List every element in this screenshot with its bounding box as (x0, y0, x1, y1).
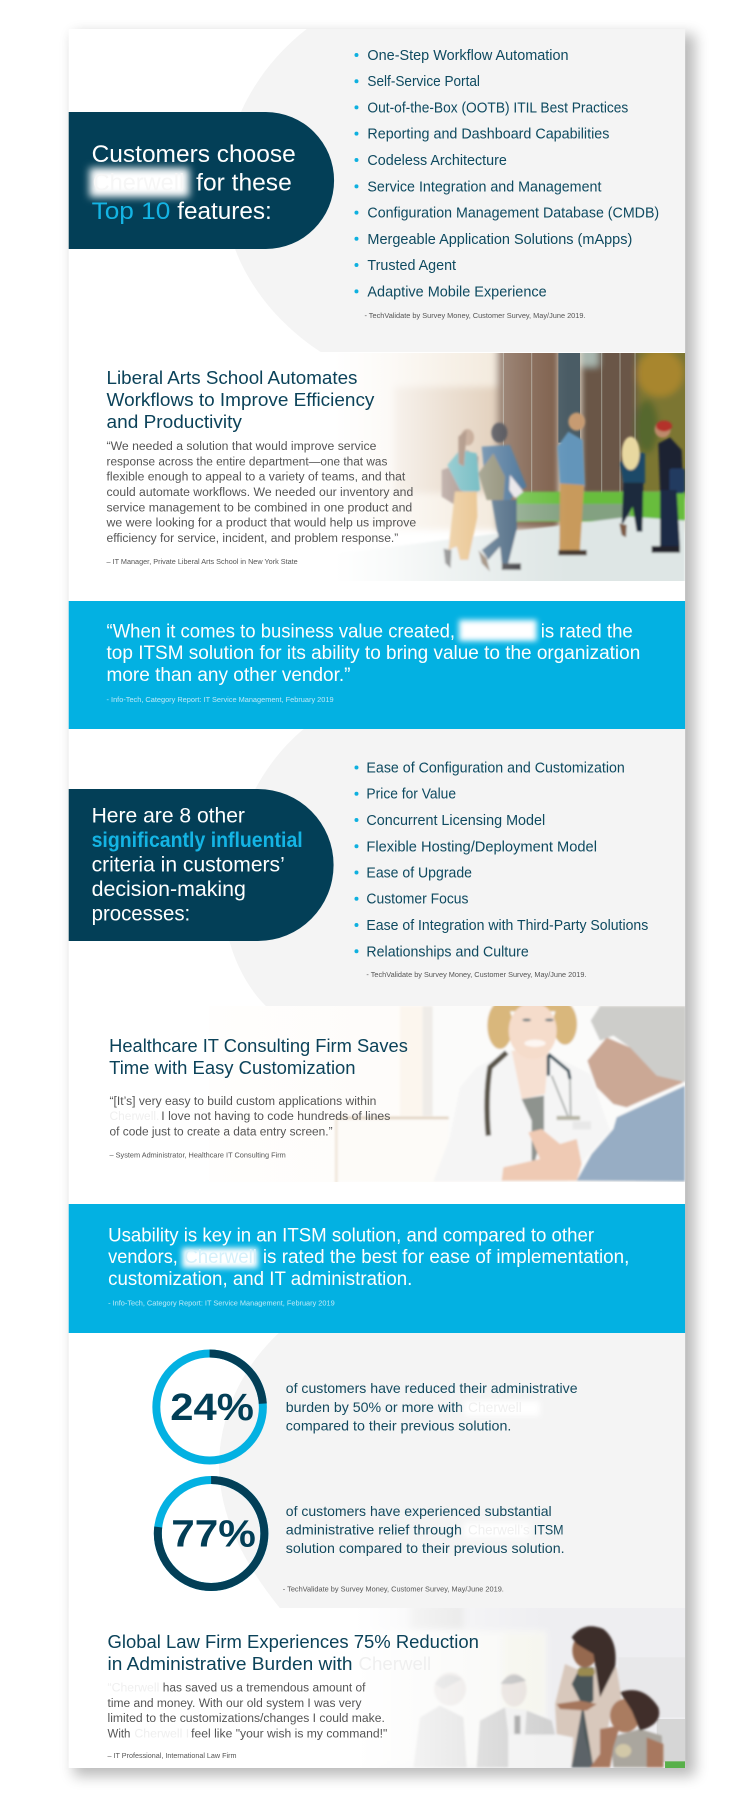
quote text: flexible enough to appeal to a variety of teams, and that (107, 470, 406, 484)
survey source: - TechValidate by Survey Money, Customer Survey, May/June 2019. (283, 1585, 504, 1594)
grey arc background (225, 729, 685, 1006)
stat text: 24%: of customers have reduced their administrative (286, 1381, 578, 1396)
quote: top ITSM solution for its ability to bring value to the organization (107, 643, 640, 664)
attribution: – IT Professional, International Law Firm (108, 1751, 236, 1760)
quote: more than any other vendor.” (107, 665, 351, 686)
case study heading: Healthcare IT Consulting Firm Saves (109, 1035, 408, 1056)
grey arc background (219, 1333, 685, 1608)
card background (69, 29, 685, 1768)
attribution: – System Administrator, Healthcare IT Consulting Firm (110, 1151, 286, 1160)
panel: business value quote (69, 601, 685, 729)
patient's shirt (577, 1086, 685, 1181)
panel: liberal arts school case study (101, 343, 700, 583)
feature list: Configuration Management Database (CMDB) (367, 206, 659, 222)
source: - Info-Tech, Category Report: IT Service Management, February 2019 (108, 1299, 335, 1308)
panel: 8 other criteria (69, 729, 685, 1006)
quote text: could automate workflows. We needed our inventory and (107, 485, 413, 499)
case study heading (107, 367, 375, 432)
grey arc background (224, 29, 685, 352)
photo: doctor and patient (334, 1006, 685, 1182)
heading pill: Customers choose (92, 141, 296, 168)
feature list: Out-of-the-Box (OOTB) ITIL Best Practices (367, 100, 628, 116)
feature list: Trusted Agent (367, 258, 456, 274)
criteria list: Customer Focus (366, 892, 469, 908)
quote: Cherwell (184, 1247, 257, 1268)
quote: “When it comes to business value created, (107, 622, 455, 643)
stat text: 77% (286, 1504, 565, 1556)
case study heading: and Productivity (107, 411, 243, 432)
patient's hair (591, 1006, 686, 1082)
quote text: I love not having to code hundreds of lines (161, 1109, 390, 1123)
student in red beanie (658, 437, 683, 490)
stat text: 77%: Cherwell’s (468, 1523, 530, 1538)
stat text: 77%: of customers have experienced substantial (286, 1504, 552, 1519)
donut: 24% (156, 1354, 263, 1460)
quote text: limited to the customizations/changes I could make. (108, 1711, 385, 1725)
quote text (110, 1094, 390, 1139)
feature list: Mergeable Application Solutions (mApps) (367, 232, 632, 248)
stat text: 77%: solution compared to their previous solution. (286, 1541, 565, 1556)
quote text: response across the entire department—one that was (107, 454, 387, 468)
quote text: time and money. With our old system I was very (108, 1696, 362, 1710)
case study heading: Time with Easy Customization (109, 1057, 356, 1078)
photo: students on campus (387, 353, 686, 581)
heading pill: Cherwell (93, 169, 184, 197)
criteria list: Ease of Upgrade (366, 865, 472, 882)
heading pill: criteria in customers’ (92, 854, 285, 877)
feature list: One-Step Workflow Automation (367, 48, 569, 64)
donut: 77%: 77% (171, 1514, 256, 1556)
heading pill: decision-making (92, 878, 246, 901)
feature list: Self-Service Portal (367, 74, 480, 90)
stat text: 77%: ITSM (534, 1523, 564, 1538)
quote text (106, 439, 416, 545)
survey source: - TechValidate by Survey Money, Customer Survey, May/June 2019. (364, 311, 586, 320)
feature list: Reporting and Dashboard Capabilities (367, 127, 609, 143)
criteria list: Ease of Integration with Third-Party Solutions (366, 918, 648, 934)
panel: healthcare case study (109, 1002, 687, 1183)
panel: global law firm case study (69, 1604, 687, 1768)
quote (107, 620, 640, 686)
heading pill: processes: (92, 903, 190, 926)
source: - Info-Tech, Category Report: IT Service Management, February 2019 (107, 695, 334, 704)
case study heading: Liberal Arts School Automates (107, 367, 357, 388)
quote text: “Cherwell (108, 1681, 159, 1695)
blonde student (620, 450, 645, 483)
quote text: service management to be combined in one product and (107, 500, 412, 514)
quote text: “We needed a solution that would improve service (107, 439, 377, 453)
donut: 77% (158, 1480, 264, 1587)
quote text: “[It’s] very easy to build custom applications within (110, 1094, 377, 1108)
quote: Usability is key in an ITSM solution, and compared to other (108, 1226, 594, 1247)
stat text: 24%: burden by 50% or more with (286, 1400, 463, 1415)
hands (502, 1129, 582, 1181)
standing woman (555, 1664, 622, 1767)
heading pill (69, 789, 334, 941)
quote: vendors, (108, 1247, 178, 1268)
heading pill: Here are 8 other (92, 805, 245, 828)
quote text (108, 1681, 387, 1741)
photo: office meeting (410, 1608, 685, 1768)
quote text: With (108, 1727, 131, 1741)
criteria list: Price for Value (366, 787, 456, 803)
feature list (354, 48, 659, 300)
feature list: Adaptive Mobile Experience (367, 284, 547, 300)
case study heading (108, 1631, 479, 1674)
quote text: has saved us a tremendous amount of (163, 1681, 366, 1695)
seated woman (610, 1729, 663, 1767)
case study heading: in Administrative Burden with (108, 1653, 352, 1674)
criteria list: Relationships and Culture (366, 944, 529, 960)
quote text: of code just to create a data entry screen.” (110, 1125, 333, 1139)
feature list: Service Integration and Management (367, 179, 601, 195)
criteria list: Concurrent Licensing Model (366, 813, 545, 829)
quote text: we were looking for a product that would help us improve (106, 516, 416, 530)
heading pill: for these (196, 169, 292, 197)
doctor's coat (433, 1051, 610, 1181)
doctor's hair and face (487, 1002, 513, 1049)
criteria list: Flexible Hosting/Deployment Model (366, 839, 597, 855)
quote text: Cherwell I (134, 1727, 189, 1741)
case study heading (109, 1035, 408, 1078)
feature list: Codeless Architecture (367, 153, 507, 169)
heading pill: significantly influential (92, 829, 303, 852)
quote: customization, and IT administration. (108, 1269, 412, 1290)
panel: usability quote (69, 1204, 685, 1333)
attribution: – IT Manager, Private Liberal Arts School in New York State (107, 557, 298, 566)
quote text: efficiency for service, incident, and problem response.” (107, 531, 398, 545)
heading pill: Top 10 (92, 198, 170, 225)
heading pill (69, 112, 334, 249)
heading pill: features: (177, 198, 272, 225)
stat text: 24%: Cherwell (468, 1400, 522, 1415)
stat text: 24%: compared to their previous solution. (286, 1419, 511, 1434)
panel: statistics (156, 1333, 685, 1608)
quote: is rated the (541, 622, 633, 643)
case study heading: Cherwell (358, 1653, 431, 1674)
case study heading: Workflows to Improve Efficiency (107, 389, 375, 410)
case study heading: Global Law Firm Experiences 75% Reduction (108, 1631, 479, 1652)
criteria list: Ease of Configuration and Customization (366, 760, 625, 777)
standing student in denim (557, 432, 585, 487)
walking students (442, 450, 478, 507)
criteria list (354, 760, 648, 960)
quote text: Cherwell. (110, 1109, 159, 1123)
stat text: 77%: administrative relief through (286, 1523, 462, 1538)
stethoscope (487, 1052, 507, 1136)
donut: 24%: 24% (170, 1387, 254, 1429)
quote (108, 1226, 629, 1290)
patient's neck (587, 1037, 683, 1107)
panel: top 10 features (69, 29, 685, 352)
quote: is rated the best for ease of implementation, (263, 1247, 629, 1268)
stat text: 24% (286, 1381, 578, 1434)
seated men (415, 1673, 555, 1768)
survey source: - TechValidate by Survey Money, Customer Survey, May/June 2019. (366, 970, 586, 979)
quote text: feel like "your wish is my command!" (191, 1727, 387, 1741)
